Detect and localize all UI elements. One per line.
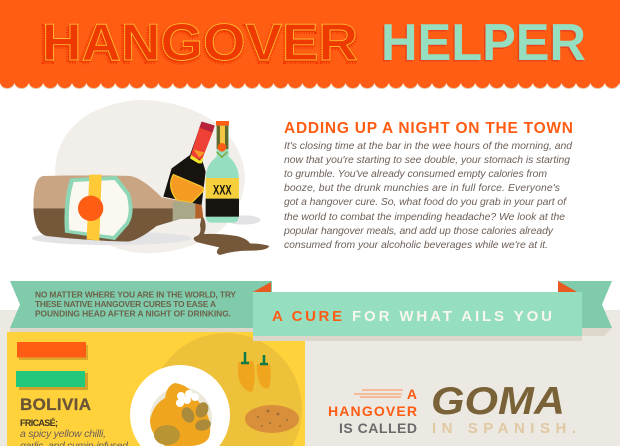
left ribbon	[10, 281, 272, 332]
title: HELPER	[381, 14, 586, 72]
black bottle	[163, 122, 215, 205]
callout word: GOMA	[431, 380, 565, 423]
speed lines	[354, 390, 403, 397]
right ribbon tail	[558, 281, 612, 336]
intro paragraph: now that you're starting to see double, your stomach is starting	[284, 155, 570, 166]
lying bottle	[30, 173, 207, 245]
backdrop blob	[55, 100, 245, 253]
panel: Bolivia	[7, 332, 305, 446]
dish description: a spicy yellow chilli,	[20, 428, 106, 440]
icon: chilli peppers	[238, 352, 271, 392]
title	[40, 14, 586, 74]
intro paragraph: the world to combat the impending headache? We look at the	[284, 212, 565, 223]
beige lower section	[0, 310, 620, 446]
ribbon text: POUNDING HEAD AFTER A NIGHT OF DRINKING.	[35, 308, 231, 318]
ribbon text: THESE NATIVE HANGOVER CURES TO EASE A	[35, 299, 216, 309]
callout lead-in text: HANGOVER	[328, 403, 417, 419]
spill puddle	[194, 217, 269, 255]
callout lead-in text: A	[407, 386, 417, 402]
intro paragraph: consumed from your alcoholic beverages while we're at it.	[284, 240, 548, 251]
intro paragraph: got a hangover cure. So, what food do you grab in your part of	[284, 197, 567, 208]
plate of fricase	[130, 365, 230, 446]
dish name: FRICASÉ;	[20, 418, 58, 428]
intro paragraph: to grumble. You've already consumed empty calories from	[284, 169, 547, 180]
flag of Bolivia	[16, 342, 88, 390]
title: HANGOVER	[42, 14, 358, 72]
header banner	[0, 0, 620, 90]
callout lead-in text	[328, 386, 417, 436]
callout lead-in text: IS CALLED	[339, 420, 417, 436]
ribbon heading: A CURE	[272, 308, 342, 325]
main ribbon: a cure for what ails you	[253, 281, 582, 341]
XXX bottle	[206, 121, 239, 223]
country name: BOLIVIA	[20, 395, 91, 414]
language callout	[328, 380, 576, 437]
intro heading: ADDING UP A NIGHT ON THE TOWN	[284, 120, 573, 137]
ribbon text: NO MATTER WHERE YOU ARE IN THE WORLD, TRY	[35, 290, 236, 300]
dish description	[20, 428, 129, 446]
intro paragraph: booze, but the drunk munchies are in full force. Everyone's	[284, 183, 560, 194]
XXX bottle: XXX	[213, 182, 232, 198]
icon: bread	[245, 405, 299, 433]
intro paragraph: popular hangover meals, and add up those calories already	[283, 226, 554, 237]
bottle label	[64, 176, 133, 240]
ground shadows	[32, 215, 261, 245]
illustration: spilled bottles	[30, 100, 269, 255]
callout tail: IN SPANISH.	[432, 420, 576, 437]
intro text block	[283, 120, 573, 251]
title: HANGOVER	[40, 16, 358, 74]
intro paragraph	[283, 141, 573, 251]
intro paragraph: It's closing time at the bar in the wee hours of the morning, and	[284, 141, 573, 152]
title: HELPER	[380, 16, 584, 74]
backdrop circle	[150, 333, 302, 446]
ribbon heading: FOR WHAT AILS YOU	[352, 308, 552, 325]
ribbon text	[35, 290, 236, 318]
